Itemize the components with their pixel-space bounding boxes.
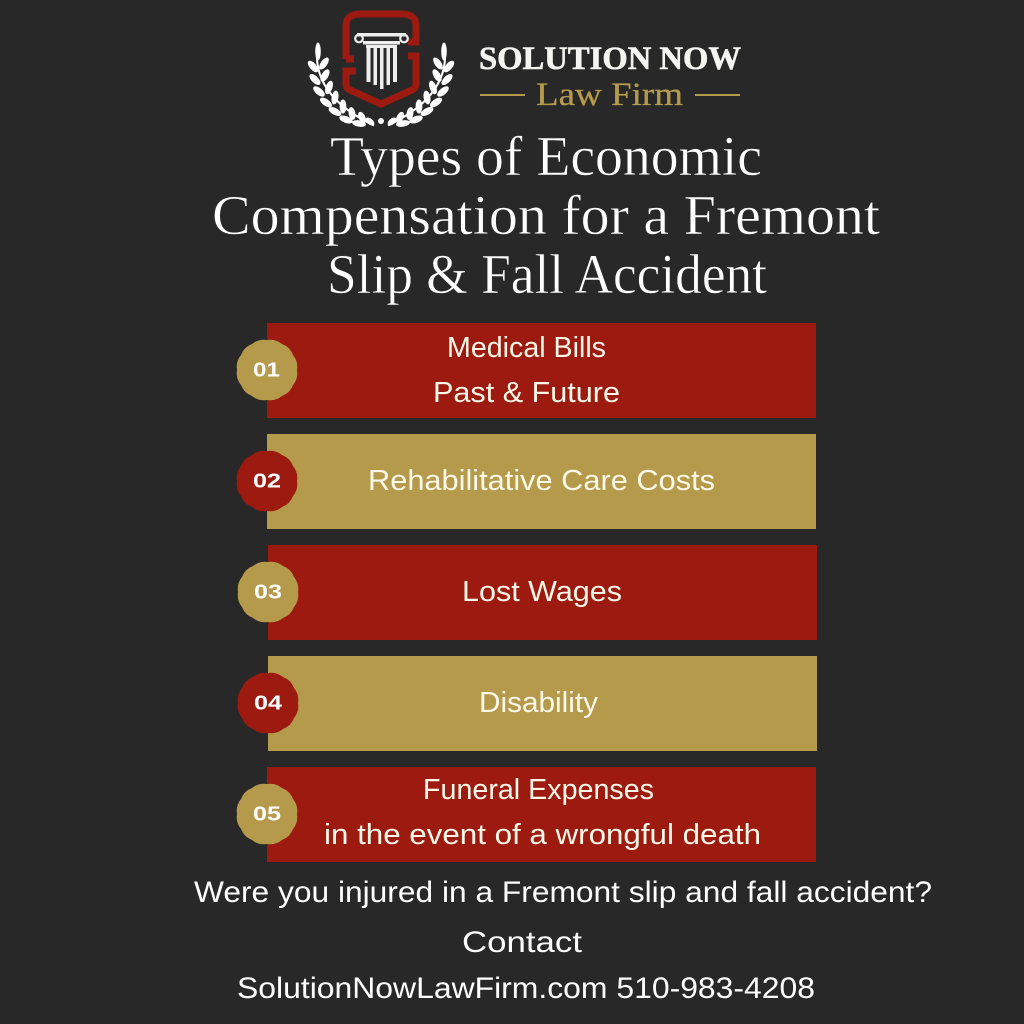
panel: item 03 lost wages: Lost Wages [462,576,622,608]
panel: item 01 medical bills: Past & Future [433,377,620,409]
panel: item 01 medical bills [237,323,816,418]
firm name: SOLUTION NOW [479,41,741,77]
panel: item 03 lost wages [238,545,817,640]
call to action: Were you injured in a Fremont slip and fall accident? [194,876,932,909]
panel: item 04 disability: Disability [479,687,599,719]
badge 03: 03 [254,582,282,604]
badge 04 [238,673,298,733]
icon: shield and column emblem [346,14,416,104]
badge 01 [237,340,297,400]
call to action [194,876,932,1005]
badge 02 [237,451,297,511]
panel: item 05 funeral expenses [237,767,816,862]
icon: star [378,118,384,124]
call to action: SolutionNowLawFirm.com 510-983-4208 [237,972,815,1005]
badge 04: 04 [254,692,283,714]
title: Compensation for a Fremont [212,185,880,247]
badge 01: 01 [253,360,280,382]
panel: item 04 disability [238,656,817,751]
firm subtitle: Law Firm [536,77,683,113]
icon: right laurel branch [386,42,456,128]
title [212,126,880,306]
panel: item 05 funeral expenses: in the event of a wrongful death [324,819,761,851]
badge 05: 05 [253,804,281,826]
icon: left laurel branch [306,42,376,128]
call to action: Contact [462,926,583,959]
badge 05 [237,784,297,844]
panel: item 02 rehabilitative care: Rehabilitative Care Costs [368,465,715,497]
title: Slip & Fall Accident [327,244,767,306]
logo [306,14,741,128]
panel: item 05 funeral expenses: Funeral Expenses [423,774,654,806]
title: Types of Economic [330,126,762,188]
badge 03 [238,562,298,622]
panel: item 01 medical bills: Medical Bills [447,332,606,364]
badge 02: 02 [253,470,281,492]
panel: item 02 rehabilitative care [237,434,816,529]
